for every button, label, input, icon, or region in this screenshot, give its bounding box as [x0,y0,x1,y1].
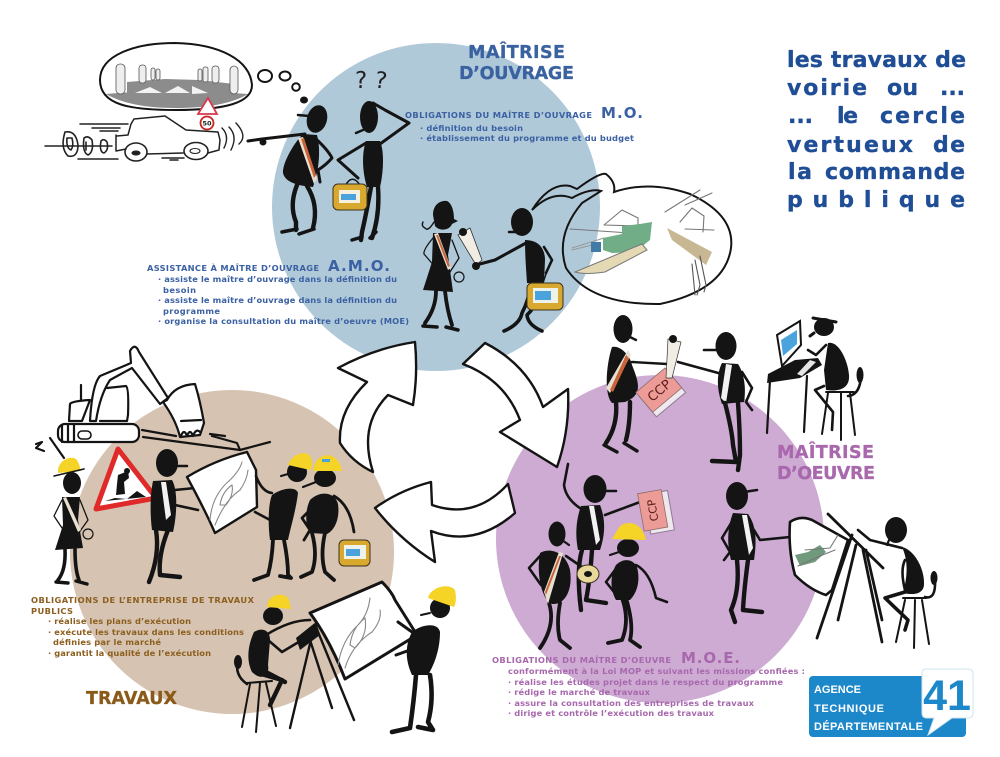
title: ... [940,76,965,101]
logo: agence technique departementale 41: 41 [923,672,971,720]
panel: travaux circle [70,390,394,714]
thought dots [258,70,307,102]
briefcase [339,540,370,566]
text block: obligations M.O.: OBLIGATIONS DU MAÎTRE D’OUVRAGE [405,109,592,120]
illustration: woman with sash and scroll [422,201,482,330]
illustration: man pointing up with CCP book [564,464,674,610]
illustration: car with thought bubble [45,43,307,161]
book CCP: CCP [645,377,675,405]
briefcase [333,179,367,210]
easel plan [310,582,417,679]
road signs [198,98,217,114]
text block: assistance A.M.O.: ASSISTANCE À MAÎTRE D’OUVRAGE [147,262,319,273]
heading: maitrise d'ouvrage: MAÎTRISE [468,41,565,63]
heading: maitrise d'ouvrage [459,41,574,84]
illustration: project manager at plan [722,482,790,622]
title: commande [825,160,965,185]
text block: obligations entreprise de travaux: · réalise les plans d’exécution [48,616,191,626]
illustration: car with thought bubble: 50 [202,120,212,128]
illustration: official with sash and hard hat in hand [529,522,599,648]
text block: obligations entreprise de travaux: · exécute les travaux dans les conditions [48,627,244,637]
text block: assistance A.M.O.: A.M.O. [328,257,390,275]
illustration: worker in hard hat on purple [606,523,667,647]
thought bubble [100,43,252,110]
panel: maitrise d'oeuvre circle [496,375,824,703]
text block: obligations M.O.E.: OBLIGATIONS DU MAÎTRE D’OEUVRE [492,654,671,665]
text block: obligations entreprise de travaux: définies par le marché [53,637,161,647]
arrow: maitrise d'ouvrage to maitrise d'oeuvre [463,343,568,467]
text block: assistance A.M.O.: programme [163,306,220,316]
text block: obligations M.O.: M.O. [601,104,643,122]
text block: obligations M.O.E.: · réalise les études projet dans le respect du programme [508,677,783,687]
illustration: designer at computer [767,318,864,440]
arrow: travaux to maitrise d'ouvrage [338,342,416,472]
car [45,116,220,160]
title: de [933,133,965,158]
illustration: drafter at easel, right [790,514,938,648]
text block: obligations M.O.E.: M.O.E. [681,649,740,667]
illustration: seated drafter at easel [234,582,417,732]
computer desk [767,376,807,433]
illustration: engineer with plan [149,449,198,582]
illustration: standing worker holding plan [392,586,456,732]
heading: maitrise d'oeuvre [777,441,875,484]
title: p u b l i q u e [787,188,965,213]
illustration: excavator [58,347,270,450]
illustration: questioning assistant with briefcase: ? [373,67,389,95]
briefcase [527,274,563,310]
scroll [458,228,482,265]
heading: maitrise d'oeuvre: MAÎTRISE [777,441,874,463]
sash [298,137,317,184]
text block: obligations M.O.E.: conformément à la Loi MOP et suivant les missions confiées : [508,666,805,676]
text block: obligations entreprise de travaux: · garantit la qualité de l’exécution [48,648,211,658]
title: voirie [787,76,867,101]
logo: agence technique departementale 41: TECHNIQUE [814,703,884,715]
text block: obligations M.O.E.: · dirige et contrôle l’exécution des travaux [508,708,715,718]
heading: maitrise d'oeuvre: D’OEUVRE [777,464,875,484]
illustration: woman in hard hat [36,438,93,584]
illustration: elected official pointing [248,103,332,234]
logo: agence technique departementale 41: AGENCE [814,684,861,696]
text block: obligations M.O.E.: · assure la consultation des entreprises de travaux [508,698,755,708]
book CCP [638,489,674,535]
text block: assistance A.M.O. [147,257,409,326]
scroll [666,339,681,378]
title: cercle [880,104,965,129]
text block: obligations M.O.: · définition du besoin [420,123,523,133]
text block: obligations entreprise de travaux [31,595,255,658]
title: le [837,104,858,129]
illustration: official handing CCP to project manager [604,315,752,470]
speech bubble with road plan [532,174,731,304]
illustration: two workers in hard hats [254,453,370,580]
arrow: maitrise d'oeuvre to travaux [375,482,515,562]
text block: assistance A.M.O.: · assiste le maître d’ouvrage dans la définition du [158,274,397,284]
monitor [777,321,801,366]
logo: agence technique departementale 41: DÉPARTEMENTALE [814,720,923,733]
title: ou [887,76,918,101]
road scene [570,190,714,295]
text block: obligations M.O.E. [492,649,805,718]
imagined road scene [106,64,248,108]
illustration: questioning assistant with briefcase [333,67,409,240]
text block: obligations M.O.: · établissement du programme et du budget [420,133,634,143]
question marks: ? [355,68,367,94]
text block: assistance A.M.O.: · assiste le maître d’ouvrage dans la définition du [158,295,397,305]
panel: maitrise d'ouvrage circle [272,43,600,371]
illustration: assistant handing scroll with briefcase [472,208,563,331]
logo: agence technique departementale 41 [809,669,973,737]
title: la [788,160,812,185]
book CCP [636,368,686,417]
book CCP: CCP [645,498,661,522]
heading: maitrise d'ouvrage: D’OUVRAGE [459,64,574,84]
text block: obligations entreprise de travaux: PUBLICS [31,606,73,616]
heading: travaux: TRAVAUX [86,689,178,709]
text block: assistance A.M.O.: · organise la consultation du maître d’oeuvre (MOE) [158,316,409,326]
text block: obligations M.O. [405,104,643,143]
title [787,48,966,213]
title: ... [788,104,813,129]
title: les travaux de [787,48,966,73]
easel plan with road scene [790,518,848,595]
icon: roadworks warning sign [96,449,156,509]
text block: assistance A.M.O.: besoin [163,285,196,295]
title: vertueux [787,133,913,158]
text block: obligations M.O.E.: · rédige le marché de travaux [508,687,651,697]
text block: obligations entreprise de travaux: OBLIGATIONS DE L’ENTREPRISE DE TRAVAUX [31,595,255,605]
plan map held by workers [187,452,257,533]
